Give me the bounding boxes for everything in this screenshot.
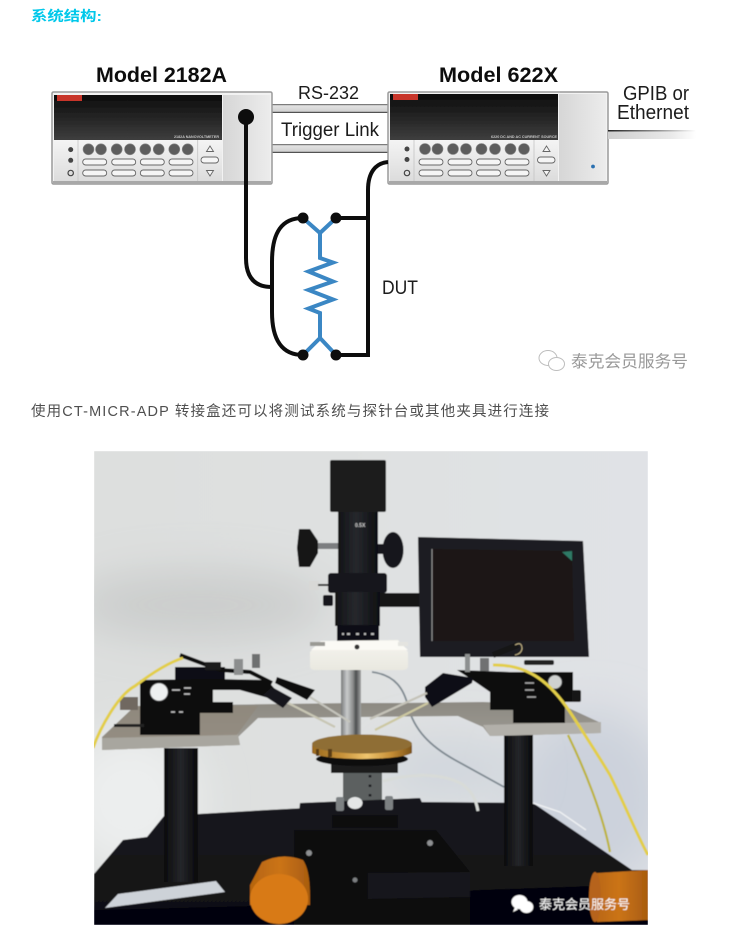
label: GPIB or Ethernet: Ethernet — [617, 102, 689, 124]
wire: left yellow probe cable — [93, 658, 183, 748]
label: RS-232: RS-232 — [298, 83, 359, 103]
nameplate — [105, 881, 225, 908]
monitor — [380, 537, 589, 657]
knobs: small lens screws — [309, 581, 333, 606]
positioner: left — [114, 654, 287, 735]
handle: right orange cylinder — [589, 870, 648, 922]
wire: right yellow probe cable — [493, 665, 648, 855]
instrument: Model 622X: 6220 DC AND AC CURRENT SOURCE — [491, 134, 557, 139]
link: GPIB or Ethernet band — [608, 130, 696, 139]
table base — [94, 802, 648, 925]
terminals: four-wire contact dots — [298, 212, 342, 360]
watermark: diagram: 泰克会员服务号 — [571, 352, 688, 371]
title: Model 622X: Model 622X — [439, 64, 558, 87]
instrument: Model 2182A — [52, 92, 272, 184]
label: Trigger Link: Trigger Link — [281, 120, 379, 141]
DUT: resistor symbol — [303, 218, 336, 355]
lens tube — [328, 512, 387, 641]
instrument: Model 622X — [388, 92, 608, 184]
link: RS-232 band — [272, 104, 389, 113]
link: Trigger Link band — [272, 144, 389, 153]
stage column — [343, 772, 382, 808]
title: Model 2182A: Model 2182A — [96, 64, 227, 87]
wall background — [60, 451, 670, 925]
wiring: black sense and source leads — [246, 117, 388, 355]
microscope pole — [341, 668, 361, 738]
watermark: diagram — [539, 350, 688, 371]
heading: system structure: 系统结构: — [31, 8, 102, 24]
watermark: photo — [512, 895, 630, 913]
label: GPIB or Ethernet — [617, 83, 689, 124]
lens tube: 0.5X — [355, 523, 366, 529]
knob: left focus — [297, 529, 338, 567]
columns: platform supports — [164, 734, 533, 882]
probe holders: left — [263, 677, 350, 727]
label: DUT: DUT — [382, 278, 418, 299]
text block: adapter description: 使用CT-MICR-ADP 转接盒还可以将测试系统与探针台或其他夹具进行连接 — [31, 403, 549, 420]
stage: XY translation — [294, 796, 470, 925]
watermark: photo: 泰克会员服务号 — [539, 897, 630, 912]
wire: gray cable — [372, 672, 504, 787]
label: GPIB or Ethernet: GPIB or — [623, 83, 689, 105]
connector: input jack — [238, 109, 254, 125]
handle: left orange cylinder — [250, 856, 310, 924]
platform: probe plates — [102, 702, 601, 750]
camera — [330, 460, 386, 512]
panel: system wiring diagram — [52, 64, 696, 360]
positioner: right — [457, 644, 581, 723]
wire: right thin yellow cable — [568, 735, 610, 852]
instrument: Model 2182A: 2182A NANOVOLTMETER — [174, 134, 219, 139]
photo: probe station — [60, 451, 670, 925]
wire: white cable — [383, 775, 478, 811]
probe holders: right — [370, 673, 473, 730]
ring light — [310, 640, 408, 670]
chuck: gold wafer stage — [312, 734, 412, 773]
knob: right focus — [378, 532, 404, 568]
